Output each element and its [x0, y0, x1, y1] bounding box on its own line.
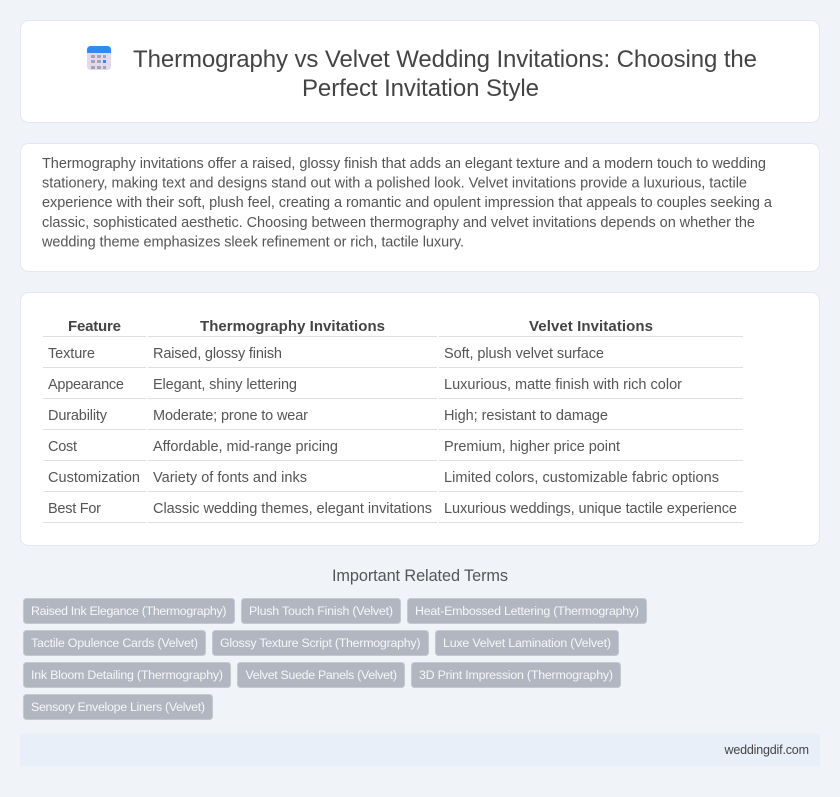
heading: Perfect Invitation Style	[302, 75, 539, 102]
tag: luxe velvet lamination	[436, 630, 618, 656]
tag: tactile opulence cards: Tactile Opulence Cards (Velvet)	[31, 636, 198, 650]
table row: cost: Premium, higher price point	[444, 439, 620, 455]
table header row: Velvet Invitations	[529, 318, 653, 335]
table row: texture: Soft, plush velvet surface	[444, 346, 604, 362]
table row: durability: Durability	[48, 408, 108, 424]
heading	[133, 46, 757, 102]
panel: comparison table card	[20, 292, 820, 546]
table row: cost: Affordable, mid-range pricing	[153, 439, 338, 455]
table row: durability: Moderate; prone to wear	[153, 408, 308, 424]
tag: velvet suede panels	[238, 662, 404, 688]
table row: best for: Best For	[48, 501, 101, 517]
tag: sensory envelope liners: Sensory Envelope Liners (Velvet)	[31, 700, 205, 714]
table header row	[68, 318, 653, 335]
table row: customization: Limited colors, customizable fabric options	[444, 470, 719, 486]
tag: velvet suede panels: Velvet Suede Panels (Velvet)	[246, 668, 397, 682]
table row: customization: Variety of fonts and inks	[153, 470, 307, 486]
table row: durability: High; resistant to damage	[444, 408, 608, 424]
tag: plush touch finish: Plush Touch Finish (Velvet)	[249, 604, 393, 618]
description text: stationery, making text and designs stand out with a polished look. Velvet invitations provide a luxurious, tactile	[42, 176, 747, 192]
table row: best for: Classic wedding themes, elegant invitations	[153, 501, 432, 517]
tag: ink bloom detailing: Ink Bloom Detailing (Thermography)	[31, 668, 223, 682]
icon: calendar	[87, 46, 111, 70]
tag: luxe velvet lamination: Luxe Velvet Lamination (Velvet)	[443, 636, 611, 650]
tag: glossy texture script: Glossy Texture Script (Thermography)	[220, 636, 420, 650]
tag: raised ink elegance: Raised Ink Elegance (Thermography)	[31, 604, 226, 618]
tag: sensory envelope liners	[24, 694, 212, 720]
table row: cost	[48, 439, 620, 455]
table row: appearance: Elegant, shiny lettering	[153, 377, 297, 393]
table row: texture	[48, 346, 604, 362]
description text: Thermography invitations offer a raised, glossy finish that adds an elegant texture and a modern touch to wedding	[42, 156, 766, 172]
table row: customization	[48, 470, 719, 486]
table row: durability	[48, 408, 608, 424]
description text: classic, sophisticated aesthetic. Choosing between thermography and velvet invitations depends on whether the	[42, 215, 755, 231]
panel: title card	[20, 20, 820, 122]
table row: best for: Luxurious weddings, unique tactile experience	[444, 501, 737, 517]
table row: appearance: Luxurious, matte finish with rich color	[444, 377, 682, 393]
tag: ink bloom detailing	[24, 662, 230, 688]
table row: appearance	[48, 377, 682, 393]
tag: glossy texture script	[212, 630, 428, 656]
footer bar	[20, 734, 820, 766]
table row: texture: Raised, glossy finish	[153, 346, 282, 362]
table row: cost: Cost	[48, 439, 77, 455]
tag: raised ink elegance	[24, 598, 234, 624]
table row: best for	[48, 501, 737, 517]
table header row: Thermography Invitations	[200, 318, 385, 335]
table row: texture: Texture	[48, 346, 95, 362]
tag: tactile opulence cards	[24, 630, 206, 656]
heading: important related terms: Important Related Terms	[332, 567, 508, 585]
panel: description card	[20, 144, 820, 272]
tag: heat-embossed lettering: Heat-Embossed Lettering (Thermography)	[415, 604, 639, 618]
description text: experience with their soft, plush feel, creating a romantic and opulent impression that appeals to couples seeking a	[42, 195, 773, 211]
tag: 3d print impression	[412, 662, 620, 688]
table row: appearance: Appearance	[48, 377, 124, 393]
tag: plush touch finish	[242, 598, 400, 624]
tag: heat-embossed lettering	[408, 598, 646, 624]
tag: 3d print impression: 3D Print Impression (Thermography)	[419, 668, 613, 682]
footer bar: weddingdif.com	[724, 743, 809, 757]
description text: wedding theme emphasizes sleek refinement or rich, tactile luxury.	[41, 234, 464, 250]
table row: customization: Customization	[48, 470, 140, 486]
heading: Thermography vs Velvet Wedding Invitations: Choosing the	[133, 46, 757, 73]
description text	[41, 156, 773, 250]
table header row: Feature	[68, 318, 121, 335]
panel: related term tags	[24, 598, 646, 720]
